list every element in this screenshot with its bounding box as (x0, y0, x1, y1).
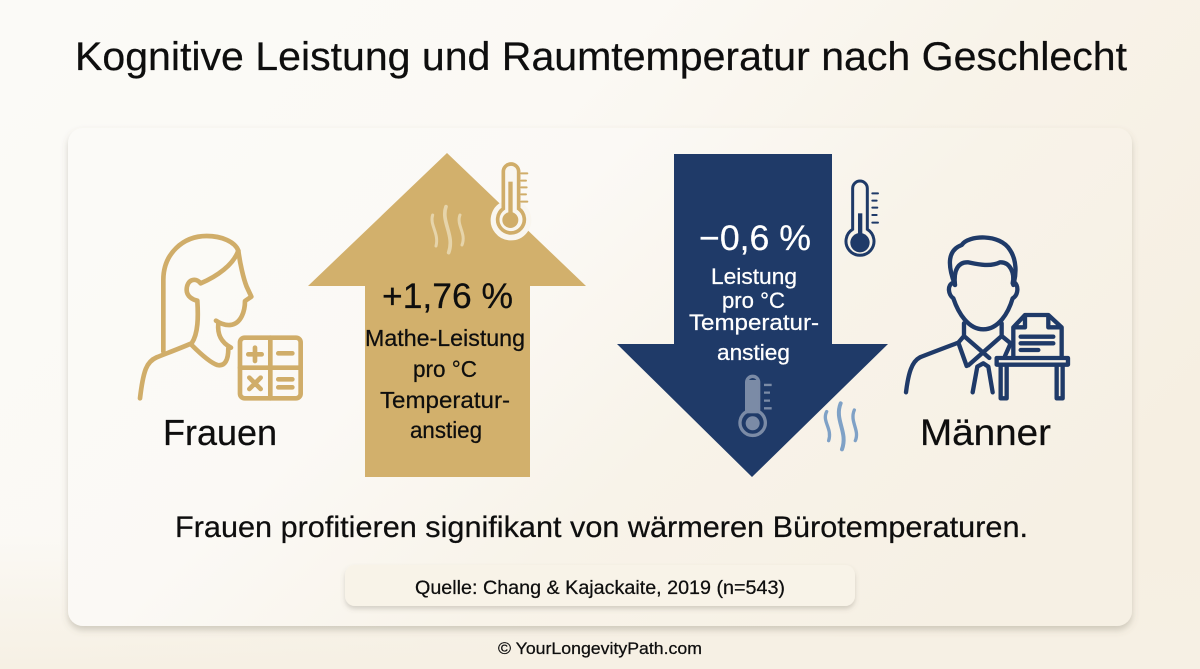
arrow shape (617, 154, 888, 477)
icon: man with desk (906, 237, 1068, 398)
arrow text women: Temperatur- (380, 387, 510, 413)
arrow shape (308, 153, 586, 477)
icon: heat waves blue (825, 403, 857, 449)
value: −0,6 %: −0,6 % (699, 219, 811, 258)
icon: thermometer grey on arrow (740, 376, 772, 435)
arrow text men: anstieg (717, 340, 790, 365)
pill background (345, 565, 855, 606)
label: Frauen: Frauen (163, 412, 277, 453)
arrow text men: Leistung (711, 264, 797, 289)
icon: thermometer navy (846, 181, 878, 255)
source text: Quelle: Chang & Kajackaite, 2019 (n=543) (415, 577, 785, 599)
value: +1,76 %: +1,76 % (382, 277, 513, 316)
footer copyright: © YourLongevityPath.com (498, 639, 702, 658)
icon: heat waves gold (432, 207, 463, 253)
arrow text men: Temperatur- (689, 310, 819, 335)
panel: main card (68, 128, 1132, 626)
icon: thermometer gold (492, 163, 530, 239)
arrow text women: anstieg (410, 417, 482, 443)
arrow text women (365, 325, 525, 443)
icon: woman with calculator (140, 236, 301, 398)
conclusion text: Frauen profitieren signifikant von wärmeren Bürotemperaturen. (175, 511, 1028, 544)
arrow text women: Mathe-Leistung (365, 325, 525, 351)
source pill (345, 565, 855, 606)
arrow text men (689, 264, 819, 365)
title: Kognitive Leistung und Raumtemperatur nach Geschlecht (75, 35, 1127, 79)
arrow text men: pro °C (722, 288, 785, 313)
arrow text women: pro °C (413, 356, 477, 382)
up arrow (308, 153, 586, 477)
down arrow (617, 154, 888, 477)
label: Männer: Männer (920, 412, 1051, 453)
